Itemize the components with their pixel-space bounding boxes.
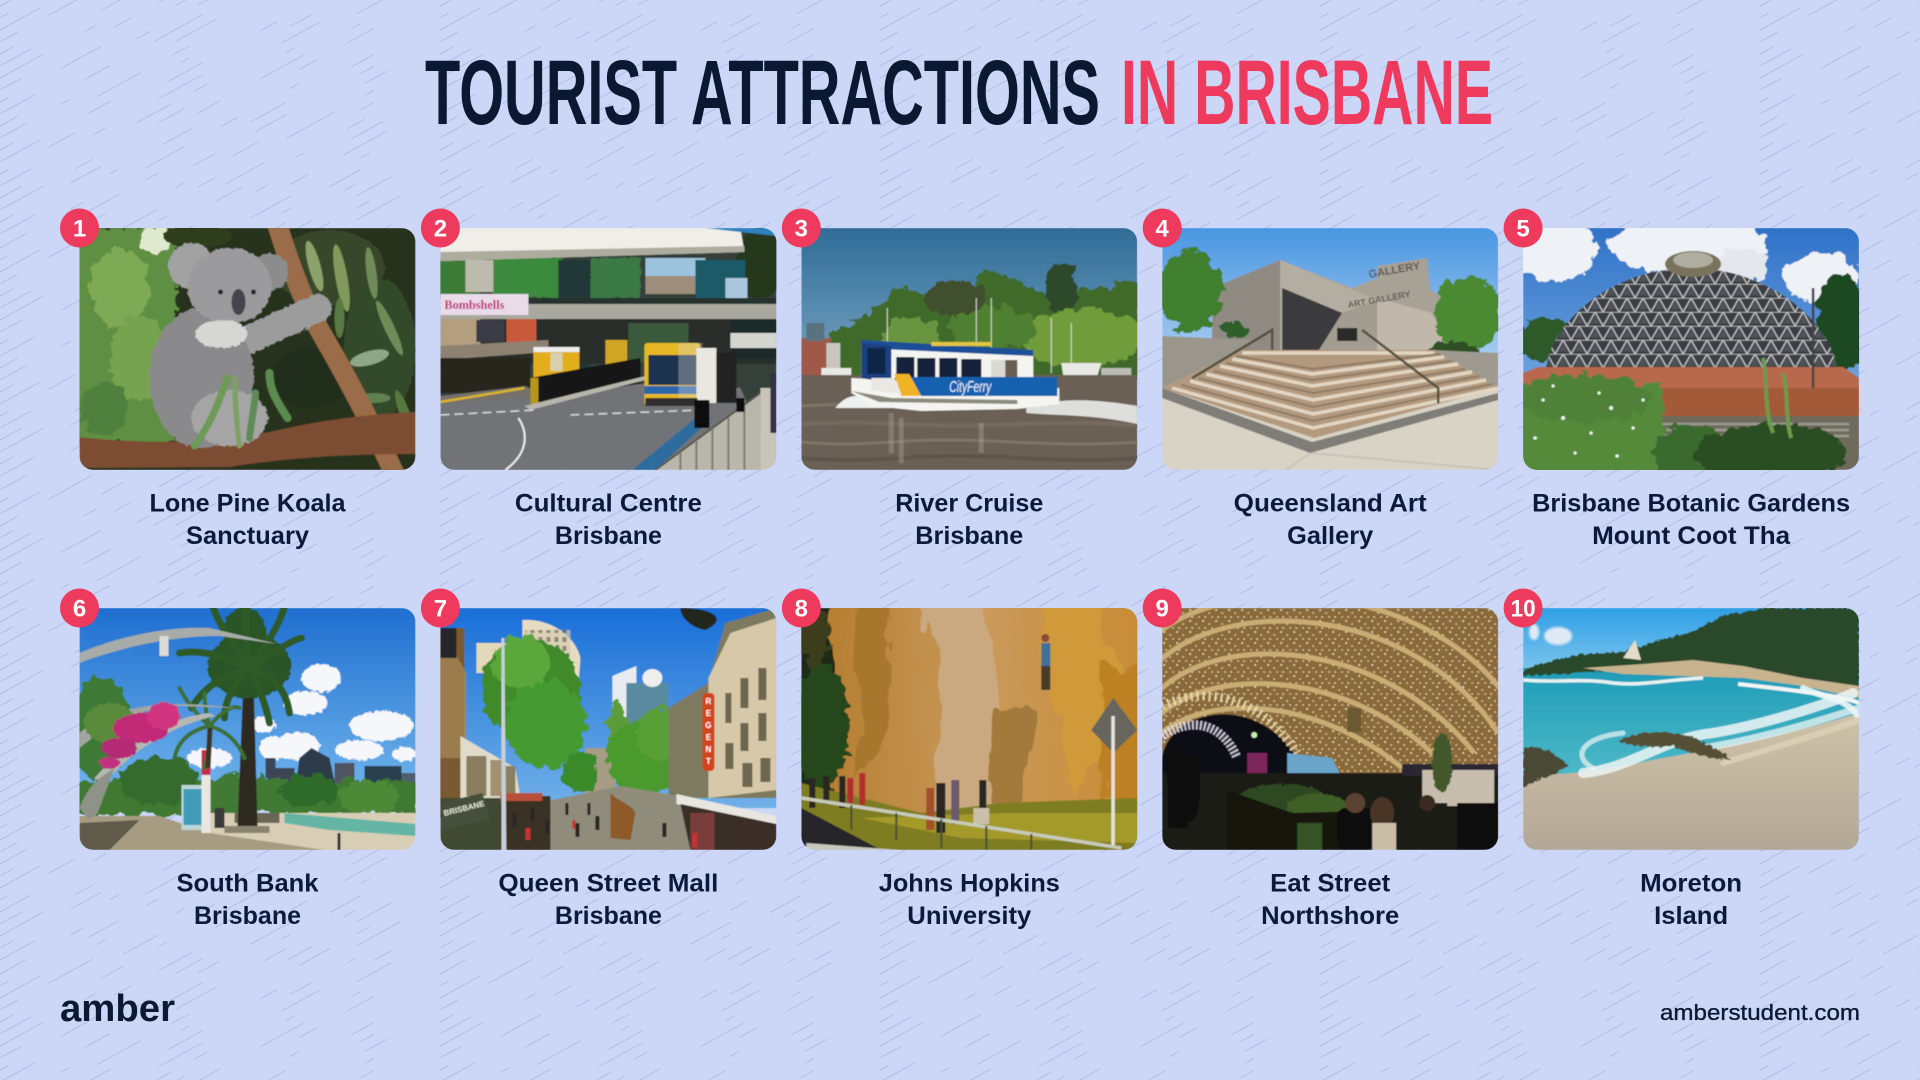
photo: South Bank parklands — [80, 608, 416, 850]
label 5: Mount Coot Tha — [1592, 522, 1791, 550]
number badge 4: 4 — [1156, 216, 1170, 242]
photo: koala on a branch — [80, 228, 416, 470]
photo: CityFerry on the river — [801, 228, 1138, 470]
card 7: Queen Street Mall Brisbane — [421, 588, 776, 930]
label 3: River Cruise — [895, 490, 1043, 518]
number badge 9 — [1143, 588, 1182, 628]
label 2: Cultural Centre — [515, 490, 702, 518]
number badge 2 — [421, 208, 460, 248]
label 7: Brisbane — [555, 902, 662, 930]
label 2: Brisbane — [555, 522, 662, 550]
photo: gallery steps: GALLERY — [1368, 260, 1422, 281]
label 9: Northshore — [1261, 902, 1399, 930]
photo: CityFerry on the river: CityFerry — [949, 379, 992, 396]
photo: illuminated arched market — [1162, 608, 1498, 850]
label 4: Queensland Art — [1234, 490, 1427, 518]
photo: botanic gardens dome — [1523, 228, 1860, 470]
label 10: Moreton — [1640, 870, 1742, 898]
number badge 1: 1 — [73, 216, 86, 242]
label 8 — [879, 870, 1060, 930]
photo: gallery steps: ART GALLERY — [1347, 289, 1411, 310]
number badge 2: 2 — [434, 216, 447, 242]
number badge 5: 5 — [1516, 216, 1530, 242]
card 4: Queensland Art Gallery — [1143, 208, 1501, 550]
label 5: Brisbane Botanic Gardens — [1532, 490, 1850, 518]
card 6: South Bank Brisbane — [60, 588, 420, 930]
number badge 9: 9 — [1156, 596, 1169, 622]
label 3: Brisbane — [915, 522, 1023, 550]
title: TOURIST ATTRACTIONS — [425, 42, 1100, 144]
label 1: Sanctuary — [186, 522, 309, 550]
label 5 — [1532, 490, 1850, 550]
photo: Queen Street Mall: N — [706, 745, 712, 754]
label 8: Johns Hopkins — [879, 870, 1060, 898]
number badge 4 — [1143, 208, 1182, 248]
number badge 8 — [782, 588, 821, 628]
title: IN BRISBANE — [1121, 42, 1493, 144]
label 4 — [1234, 490, 1427, 550]
card 8: Johns Hopkins University — [782, 588, 1161, 930]
number badge 3 — [782, 208, 821, 248]
photo: Moreton Island beach — [1523, 608, 1860, 850]
label 7: Queen Street Mall — [498, 870, 718, 898]
number badge 5 — [1504, 208, 1543, 248]
card 3: River Cruise Brisbane — [782, 208, 1141, 550]
number badge 1 — [60, 208, 99, 248]
photo: Queen Street Mall: BRISBANE — [443, 799, 486, 818]
photo: busway station: Bombshells — [444, 297, 504, 312]
label 9 — [1261, 870, 1399, 930]
label 1: Lone Pine Koala — [150, 490, 347, 518]
card 2: Cultural Centre Brisbane — [421, 208, 784, 550]
number badge 10: 10 — [1511, 596, 1536, 622]
label 8: University — [907, 902, 1031, 930]
number badge 6: 6 — [73, 596, 86, 622]
photo: Queen Street Mall: E — [706, 709, 712, 718]
photo: busway station — [440, 228, 776, 470]
label 9: Eat Street — [1270, 870, 1391, 898]
photo: gallery steps — [1162, 228, 1498, 470]
photo: cliff climbing wall — [801, 608, 1138, 850]
number badge 3: 3 — [795, 216, 808, 242]
label 2 — [515, 490, 702, 550]
label 10 — [1640, 870, 1742, 930]
card 1: Lone Pine Koala Sanctuary — [60, 208, 417, 550]
number badge 10 — [1504, 588, 1543, 628]
photo: Queen Street Mall: R — [706, 697, 712, 706]
photo: Queen Street Mall: E — [706, 733, 712, 742]
number badge 8: 8 — [795, 596, 808, 622]
photo: Queen Street Mall: G — [705, 721, 712, 730]
photo: Queen Street Mall — [440, 608, 776, 850]
label 6: South Bank — [176, 870, 319, 898]
label 7 — [498, 870, 718, 930]
card 10: Moreton Island — [1504, 588, 1859, 930]
label 3 — [895, 490, 1043, 550]
label 1 — [150, 490, 347, 550]
logo: amber: amber — [60, 988, 175, 1030]
card 5: Brisbane Botanic Gardens Mount Coot Tha — [1504, 208, 1867, 550]
label 6: Brisbane — [194, 902, 301, 930]
number badge 7 — [421, 588, 460, 628]
card 9: Eat Street Northshore — [1143, 588, 1507, 930]
number badge 7: 7 — [434, 596, 447, 622]
label 10: Island — [1654, 902, 1728, 930]
website url: amberstudent.com — [1660, 1000, 1860, 1025]
label 6 — [176, 870, 319, 930]
photo: Queen Street Mall: T — [706, 757, 711, 766]
number badge 6 — [60, 588, 99, 628]
label 4: Gallery — [1287, 522, 1373, 550]
